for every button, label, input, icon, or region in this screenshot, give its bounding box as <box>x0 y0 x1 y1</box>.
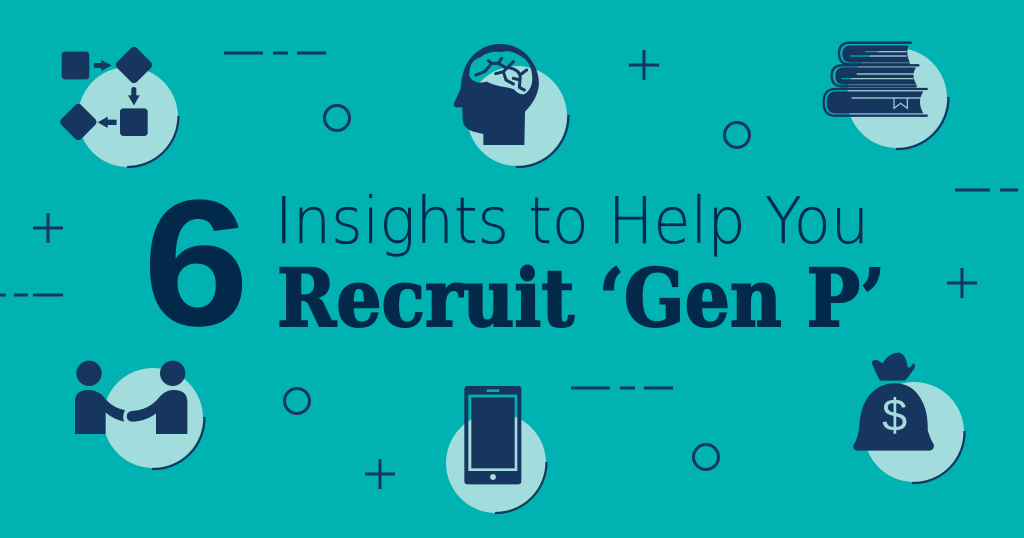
icon: handshake <box>75 361 205 469</box>
icon: flowchart <box>59 45 178 167</box>
icon: smartphone <box>446 386 546 513</box>
icon: head with brain <box>454 44 569 167</box>
icon: money bag <box>853 353 965 483</box>
icon: money bag: $ <box>882 390 907 441</box>
icon: stack of books <box>824 43 949 149</box>
big number 6: 6 <box>143 163 249 364</box>
heading line 1: Insights to Help You <box>275 185 869 259</box>
heading line 2: Recruit ‘Gen P’ <box>277 251 885 345</box>
